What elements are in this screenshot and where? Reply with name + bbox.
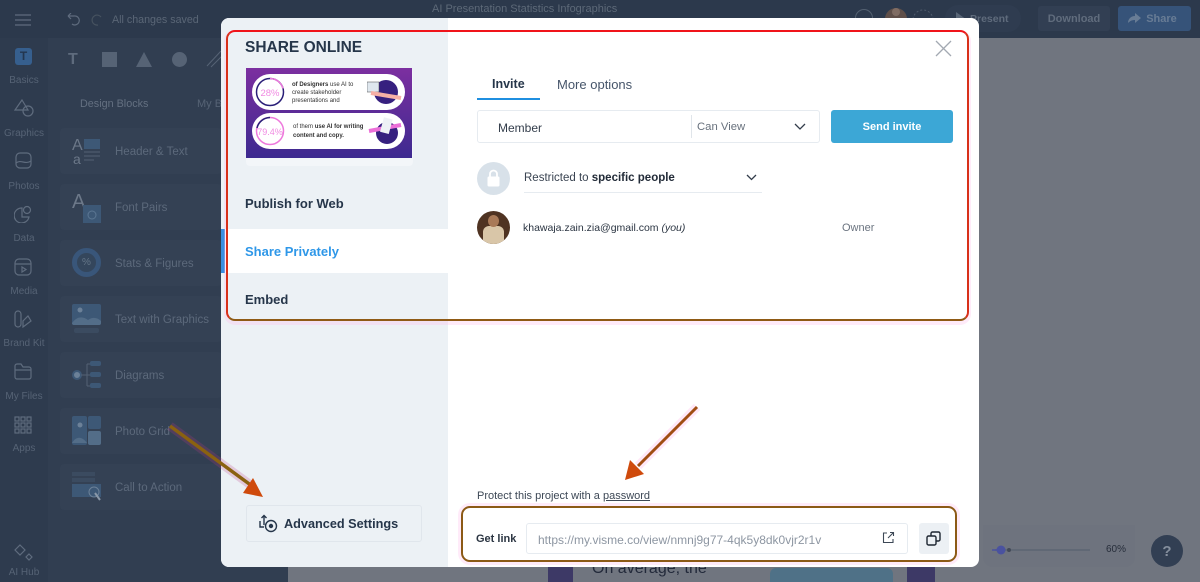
advanced settings button bbox=[246, 505, 422, 542]
document title: AI Presentation Statistics Infographics bbox=[432, 3, 617, 15]
stat text one: of Designers use AI to create stakeholder presentations and bbox=[292, 82, 353, 104]
block icon: % bbox=[82, 257, 91, 268]
block: text with graphics bbox=[60, 296, 222, 342]
ring 28 percent bbox=[256, 78, 284, 106]
arrow: to advanced settings bbox=[160, 415, 280, 505]
rail label: Brand Kit: Brand Kit bbox=[3, 338, 45, 349]
canvas purple block left bbox=[548, 567, 573, 582]
left icon rail bbox=[0, 38, 48, 582]
icon: photos bbox=[15, 152, 32, 169]
tool: line bbox=[206, 50, 221, 68]
block icon bbox=[72, 416, 101, 445]
owner role: Owner bbox=[842, 222, 874, 234]
ring 79.4 percent: 79.4% bbox=[257, 127, 283, 137]
icon: copy bbox=[926, 531, 941, 546]
zoom percentage: 60% bbox=[1106, 544, 1126, 555]
tab label: Invite bbox=[492, 77, 525, 91]
tool: text: T bbox=[68, 51, 78, 68]
icon: undo and redo bbox=[68, 13, 102, 26]
rail label: Basics: Basics bbox=[9, 75, 39, 86]
send invite button bbox=[831, 110, 953, 143]
block label: Header & Text bbox=[115, 146, 188, 158]
canvas text: On average, the bbox=[592, 560, 707, 577]
icon: settings upload bbox=[259, 514, 278, 532]
callout: invite section outline bbox=[226, 30, 969, 321]
member label: Member bbox=[498, 121, 542, 135]
canvas purple block right bbox=[907, 567, 935, 582]
block: diagrams bbox=[60, 352, 222, 398]
arrow: to password and link bbox=[620, 400, 710, 485]
present button bbox=[945, 5, 1021, 32]
help button: ? bbox=[1162, 543, 1172, 560]
nav: share privately active bbox=[221, 229, 448, 273]
permission label: Can View bbox=[697, 121, 745, 133]
save status: All changes saved bbox=[112, 14, 199, 26]
thumbnail purple background bbox=[246, 68, 412, 158]
tab: more options: More options bbox=[557, 77, 632, 92]
stat row two bbox=[252, 113, 405, 149]
block: stats and figures bbox=[60, 240, 222, 286]
block: header and text bbox=[60, 128, 222, 174]
block: call to action bbox=[60, 464, 222, 510]
link field bbox=[526, 523, 908, 554]
block icon bbox=[72, 137, 100, 165]
icon: basics: T bbox=[20, 49, 27, 63]
callout: get link outline bbox=[461, 506, 957, 562]
rail label: Apps: Apps bbox=[13, 443, 35, 454]
zoom slider bbox=[992, 546, 1090, 554]
stat row one bbox=[252, 74, 405, 110]
canvas peek below dialog bbox=[548, 560, 935, 582]
button label: Advanced Settings bbox=[284, 517, 398, 531]
user email: khawaja.zain.zia@gmail.com (you) bbox=[523, 222, 685, 234]
block icon bbox=[72, 191, 101, 223]
icon: chevron bbox=[794, 124, 806, 130]
nav: publish for web: Publish for Web bbox=[245, 196, 344, 211]
password note: Protect this project with a password bbox=[477, 490, 650, 502]
collaborator icons bbox=[855, 8, 934, 18]
block label: Photo Grid bbox=[115, 426, 170, 438]
dialog sidebar bbox=[221, 18, 448, 567]
active label: Share Privately bbox=[245, 244, 339, 259]
share button: Share bbox=[1146, 13, 1177, 25]
icon: lock bbox=[477, 162, 510, 195]
block label: Font Pairs bbox=[115, 202, 167, 214]
send invite button: Send invite bbox=[863, 121, 921, 133]
icon: apps bbox=[14, 416, 32, 434]
thumbnail card shadow bbox=[246, 68, 413, 166]
field divider bbox=[691, 115, 692, 138]
avatar head bbox=[488, 215, 499, 227]
icon: my files bbox=[14, 363, 32, 380]
rail label: Media: Media bbox=[10, 286, 38, 297]
stat text two: of them use AI for writing content and copy. bbox=[293, 124, 363, 139]
present label: Present bbox=[970, 13, 1009, 25]
block label: Text with Graphics bbox=[115, 314, 209, 326]
icon: open external bbox=[882, 532, 894, 543]
close icon bbox=[936, 40, 952, 56]
icon: menu bbox=[15, 14, 31, 26]
rail label: AI Hub: AI Hub bbox=[9, 567, 39, 578]
avatar figure bbox=[483, 226, 504, 246]
sidebar heading: SHARE ONLINE bbox=[245, 39, 362, 56]
download button bbox=[1038, 6, 1110, 31]
tab: design blocks: Design Blocks bbox=[80, 98, 148, 110]
lock glyph bbox=[488, 170, 500, 186]
block label: Call to Action bbox=[115, 482, 182, 494]
icon: media bbox=[14, 258, 32, 276]
access dropdown bbox=[524, 162, 762, 193]
avatar bbox=[477, 211, 510, 244]
rail label: Graphics: Graphics bbox=[4, 128, 44, 139]
icon: brand kit bbox=[14, 310, 32, 328]
editor top bar bbox=[0, 0, 1200, 38]
illustration one bbox=[367, 80, 402, 104]
illustration two bbox=[368, 118, 402, 144]
icon: graphics bbox=[14, 99, 34, 117]
ring 79.4 percent bbox=[256, 116, 284, 146]
invite role field bbox=[477, 110, 820, 143]
icon: basics bbox=[15, 48, 32, 65]
block icon bbox=[72, 472, 101, 500]
block: photo grid bbox=[60, 408, 222, 454]
block: font pairs bbox=[60, 184, 222, 230]
tool: circle bbox=[172, 52, 187, 67]
block icon bbox=[72, 248, 101, 277]
block icon bbox=[72, 304, 101, 333]
active indicator bbox=[221, 229, 225, 273]
tool: triangle bbox=[136, 52, 152, 67]
download button: Download bbox=[1048, 13, 1100, 25]
block icon: A bbox=[72, 191, 86, 213]
tool: square bbox=[102, 52, 117, 67]
icon: AI hub bbox=[14, 544, 33, 561]
access label: Restricted to specific people bbox=[524, 172, 675, 184]
get link label: Get link bbox=[476, 533, 516, 545]
rail label: My Files: My Files bbox=[5, 391, 43, 402]
rail label: Photos: Photos bbox=[8, 181, 40, 192]
ring 28 percent: 28% bbox=[260, 88, 280, 99]
canvas teal block bbox=[770, 568, 893, 582]
icon: share arrow bbox=[1128, 13, 1141, 23]
tab: invite active bbox=[477, 72, 540, 100]
zoom control bbox=[983, 525, 1135, 567]
help button bbox=[1151, 535, 1183, 567]
copy button bbox=[919, 523, 949, 554]
rail label: Data: Data bbox=[13, 233, 35, 244]
block icon: A bbox=[72, 137, 83, 154]
project thumbnail bbox=[246, 68, 412, 158]
shape tools row bbox=[68, 50, 221, 68]
block icon bbox=[72, 361, 101, 388]
tab: my blocks: My B bbox=[197, 98, 222, 110]
icon: play bbox=[956, 12, 964, 18]
design blocks panel bbox=[48, 38, 288, 582]
share button bbox=[1118, 6, 1191, 31]
icon: chevron bbox=[746, 174, 756, 180]
share dialog bbox=[221, 18, 979, 567]
block label: Stats & Figures bbox=[115, 258, 194, 270]
block label: Diagrams bbox=[115, 370, 164, 382]
link url: https://my.visme.co/view/nmnj9g77-4qk5y8dk0vjr2r1v bbox=[538, 533, 821, 547]
icon: data bbox=[14, 206, 31, 223]
nav: embed: Embed bbox=[245, 292, 288, 307]
